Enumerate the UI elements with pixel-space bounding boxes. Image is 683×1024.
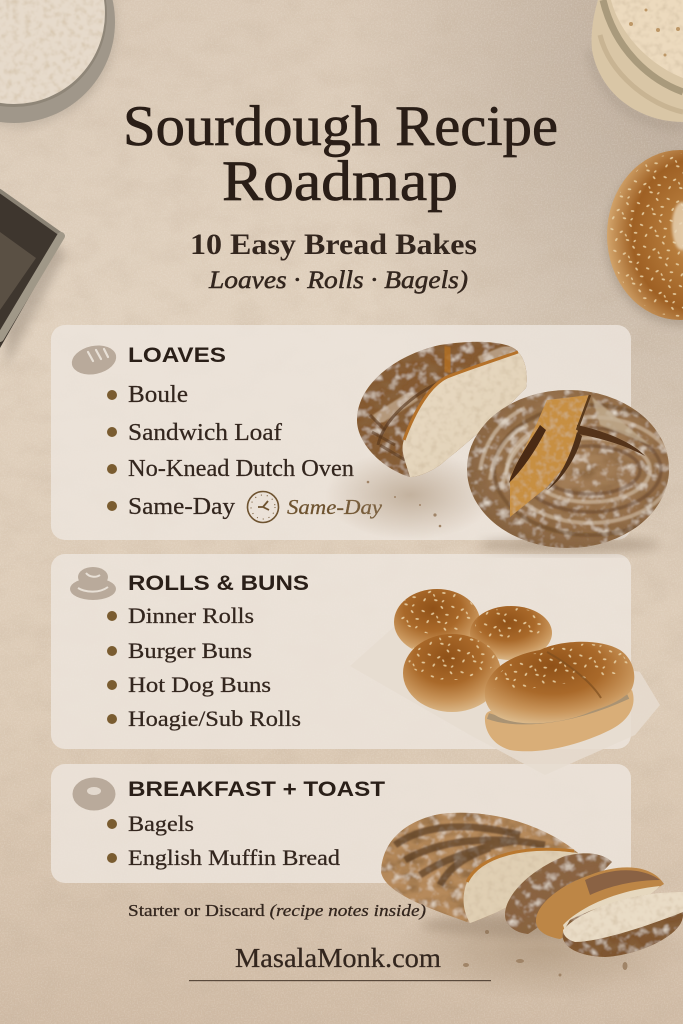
panel: rolls and buns	[51, 554, 631, 749]
icon: bagel	[72, 778, 116, 810]
slice 1	[505, 853, 612, 934]
hoagie bun top	[485, 642, 634, 723]
list: rolls and buns	[107, 603, 301, 731]
heading: breakfast and toast: BREAKFAST + TOAST	[128, 778, 385, 801]
list: breakfast and toast	[107, 811, 340, 870]
flour dust under loaves	[325, 450, 495, 540]
icon: bread loaf	[69, 342, 119, 378]
photo: halved boule loaf	[357, 342, 527, 477]
list: loaves: Sandwich Loaf	[128, 420, 282, 446]
prop: sesame bagel	[606, 150, 683, 326]
list: rolls and buns: Burger Buns	[128, 638, 252, 663]
list: loaves: Boule	[128, 382, 188, 408]
crumbs scattered under breads	[367, 481, 628, 976]
prop: flour bowl	[0, 0, 116, 127]
hoagie bun bottom	[485, 690, 634, 751]
heading: loaves: LOAVES	[128, 344, 226, 367]
photo: whole scored boule	[467, 390, 683, 553]
list: breakfast and toast: Bagels	[128, 811, 194, 836]
slice 3	[563, 892, 683, 957]
list: rolls and buns: Hot Dog Buns	[128, 672, 271, 697]
list: loaves: Same-Day	[128, 494, 235, 520]
subtitle	[190, 228, 477, 294]
loaf body	[381, 813, 578, 923]
flour dust under sliced loaf	[390, 900, 683, 1000]
prop: sourdough starter jar	[590, 0, 683, 126]
subtitle: 10 Easy Bread Bakes	[190, 228, 477, 261]
label: same-day: Same-Day	[287, 495, 383, 519]
photo: rolls and buns on parchment	[350, 589, 660, 775]
icon: clock	[248, 492, 278, 522]
title	[123, 95, 558, 213]
credit underline	[189, 980, 491, 981]
slice 2	[536, 867, 664, 939]
list: breakfast and toast: English Muffin Bread	[128, 845, 340, 870]
list: loaves: No-Knead Dutch Oven	[128, 456, 354, 482]
prop: baking tray	[0, 190, 66, 368]
parchment paper	[350, 625, 660, 775]
panel: loaves	[51, 325, 631, 540]
website credit: MasalaMonk.com	[235, 943, 441, 973]
list: rolls and buns: Hoagie/Sub Rolls	[128, 706, 301, 731]
dinner rolls	[394, 589, 552, 712]
list: loaves	[107, 382, 354, 520]
title: Roadmap	[222, 150, 458, 213]
photo: sliced loaf	[381, 813, 683, 957]
icon: rolls	[70, 567, 116, 600]
title: Sourdough Recipe	[123, 95, 558, 158]
subtitle: Loaves · Rolls · Bagels)	[208, 267, 468, 294]
note: starter or discard: Starter or Discard (recipe notes inside)	[128, 901, 426, 920]
panel: breakfast and toast	[51, 764, 631, 883]
heading: rolls and buns: ROLLS & BUNS	[128, 572, 309, 595]
list: rolls and buns: Dinner Rolls	[128, 603, 254, 628]
